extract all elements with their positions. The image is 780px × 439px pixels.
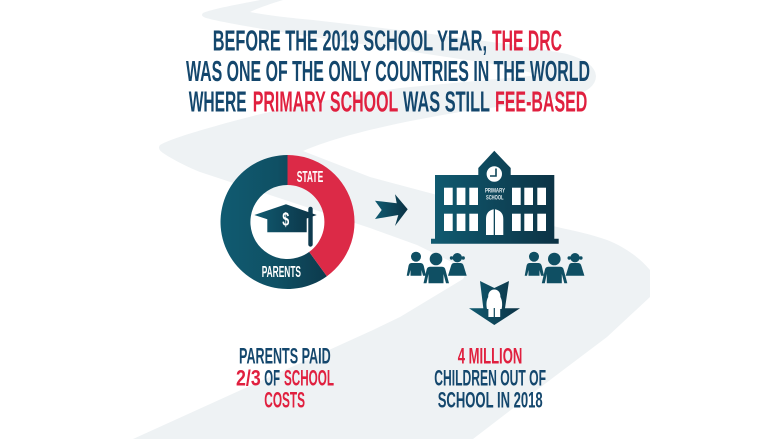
- label: state: STATE: [297, 169, 323, 186]
- text block: 4 million children: CHILDREN OUT OF: [434, 365, 546, 390]
- text block: parents paid: SCHOOL: [284, 365, 334, 390]
- label: parents: PARENTS: [262, 264, 301, 281]
- door: [486, 209, 503, 235]
- title: [186, 26, 590, 119]
- icon: right group of children: [525, 252, 584, 283]
- icon: graduation cap with dollar sign: $: [282, 210, 289, 230]
- title: WHERE: [189, 86, 247, 118]
- text block: parents paid: OF: [264, 365, 280, 390]
- title: THE DRC: [492, 26, 562, 58]
- school sign: [485, 188, 505, 202]
- donut chart: state vs parents share: [221, 155, 355, 289]
- icon: primary school building: [431, 151, 559, 244]
- text block: 4 million children: SCHOOL IN 2018: [438, 387, 543, 412]
- icon: down arrow with sad child: [469, 281, 520, 325]
- icon: left group of children: [407, 252, 467, 283]
- text block: parents paid: [236, 344, 334, 412]
- title: BEFORE THE 2019 SCHOOL YEAR,: [213, 26, 487, 58]
- donut slice: parents: [221, 155, 327, 289]
- title: FEE-BASED: [495, 86, 587, 118]
- text block: parents paid: COSTS: [264, 387, 305, 412]
- windows: [444, 188, 546, 231]
- text block: parents paid: PARENTS PAID: [239, 344, 331, 368]
- text block: 4 million children: [434, 344, 546, 412]
- title: WAS STILL: [403, 86, 490, 118]
- winding road background: [133, 0, 650, 439]
- text block: 4 million children: 4 MILLION: [458, 344, 522, 368]
- title: PRIMARY SCHOOL: [253, 86, 398, 118]
- icon: graduation cap with dollar sign: [254, 204, 317, 247]
- clock: [487, 166, 502, 182]
- school sign: PRIMARY: [485, 188, 505, 194]
- text block: parents paid: 2/3: [236, 365, 261, 390]
- school sign: SCHOOL: [486, 194, 504, 202]
- donut slice: state: [288, 155, 355, 276]
- arrow: to school: [375, 194, 408, 226]
